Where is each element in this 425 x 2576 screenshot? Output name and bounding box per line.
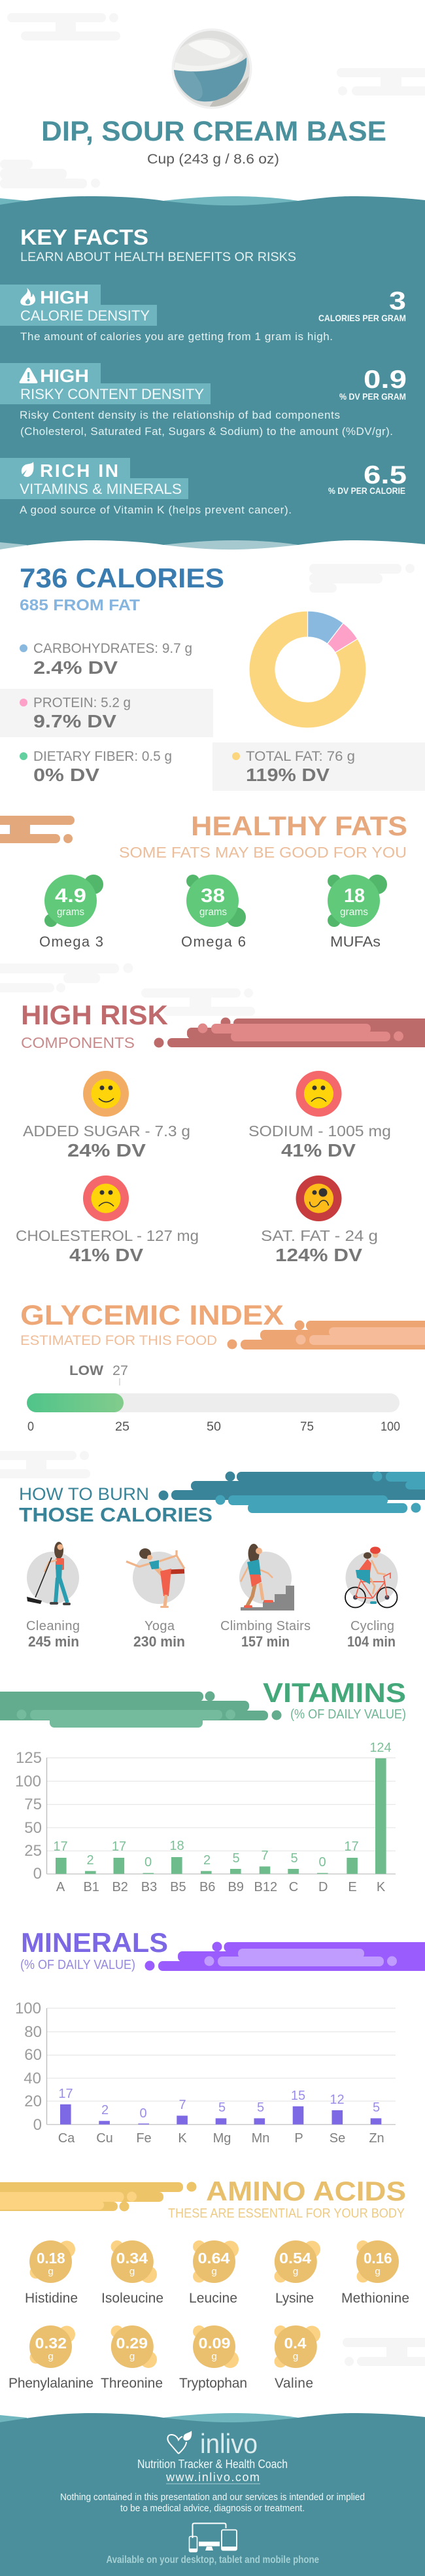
gauge: glycemic index: 100	[381, 1420, 400, 1434]
risk: cholesterol: 41% DV	[69, 1245, 143, 1265]
gauge: glycemic index: 25	[115, 1420, 129, 1434]
stat: total fat: TOTAL FAT: 76 g	[246, 749, 355, 764]
activity: cleaning: 245 min	[28, 1633, 79, 1650]
stat: carbohydrates	[20, 641, 192, 678]
amino: phenylalanine: Phenylalanine	[8, 2376, 94, 2391]
donut chart: macronutrients	[249, 611, 366, 728]
risk: added sugar	[23, 1071, 190, 1160]
heading: minerals: MINERALS	[21, 1927, 168, 1958]
decorative cloud: burn	[0, 1451, 90, 1478]
bar chart: vitamins: 25	[24, 1842, 42, 1860]
icon: leaf	[22, 462, 33, 477]
amino: tryptophan: g	[211, 2351, 217, 2362]
bar chart: vitamins: C	[289, 1880, 298, 1894]
decorative clouds: high risk	[0, 963, 255, 1016]
bar chart: vitamins: 0	[33, 1865, 42, 1883]
bar chart: vitamins: 124	[369, 1741, 392, 1755]
bar chart: vitamins: 5	[232, 1851, 240, 1866]
risk: added sugar: 24% DV	[67, 1140, 146, 1160]
bar chart: vitamins: 125	[16, 1749, 42, 1767]
gauge: glycemic index: 75	[300, 1420, 314, 1434]
gauge: glycemic index: 27	[112, 1363, 128, 1378]
disclaimer: to be a medical advice, diagnosis or treatment.	[120, 2503, 305, 2514]
fat: omega 6	[181, 875, 246, 950]
decorative cloud: amino acids	[343, 2338, 425, 2366]
heading: amino acids: AMINO ACIDS	[206, 2176, 406, 2206]
stat: protein: PROTEIN: 5.2 g	[33, 695, 131, 710]
fat: omega 6: 38	[201, 885, 225, 907]
activity: climbing stairs: 157 min	[241, 1633, 290, 1650]
amino: valine	[275, 2325, 320, 2391]
bar chart: vitamins: K	[377, 1880, 386, 1894]
bar chart: vitamins: 2	[86, 1853, 94, 1868]
subheading: vitamins: (% OF DAILY VALUE)	[290, 1707, 406, 1722]
serving size: Cup (243 g / 8.6 oz)	[147, 152, 279, 167]
gauge: glycemic index	[27, 1363, 400, 1434]
bar chart: minerals: Mg	[213, 2131, 231, 2146]
amino: histidine	[25, 2240, 78, 2306]
bar chart: vitamins: D	[318, 1880, 328, 1894]
disclaimer	[60, 2492, 365, 2514]
activity: cleaning	[26, 1542, 80, 1650]
fact: calorie density: HIGH	[40, 287, 89, 307]
bar chart: vitamins: 7	[261, 1849, 269, 1863]
fat: omega 3	[39, 875, 103, 950]
stat: protein	[0, 689, 213, 737]
panel: footer	[0, 2428, 425, 2576]
bar chart: vitamins: E	[348, 1880, 357, 1894]
bar chart: vitamins: B12	[254, 1880, 277, 1894]
logo: inlivo	[167, 2428, 258, 2459]
amino: methionine: 0.16	[364, 2250, 392, 2267]
subheading: glycemic index: ESTIMATED FOR THIS FOOD	[20, 1333, 217, 1348]
bar chart: minerals: 17	[58, 2087, 73, 2101]
heading: healthy fats: HEALTHY FATS	[191, 810, 407, 841]
decorative bars: healthy fats	[0, 816, 75, 843]
bar chart: vitamins: 17	[112, 1839, 126, 1854]
heading: glycemic index: GLYCEMIC INDEX	[20, 1300, 284, 1331]
bar chart: minerals: 40	[24, 2070, 41, 2087]
amino: histidine: 0.18	[37, 2250, 65, 2267]
amino: phenylalanine: 0.32	[35, 2335, 67, 2352]
amino: tryptophan	[179, 2325, 247, 2391]
stat: dietary fiber	[20, 749, 172, 785]
decorative bars: burn	[158, 1472, 425, 1513]
decorative bars: high risk	[154, 1018, 425, 1048]
bar chart: minerals: 20	[24, 2093, 42, 2110]
stat: total fat	[212, 742, 425, 791]
fact: calorie density: CALORIE DENSITY	[20, 307, 150, 324]
amino: phenylalanine	[8, 2325, 94, 2391]
icon: woman sweeping	[27, 1542, 71, 1605]
bar chart: vitamins: B1	[83, 1880, 99, 1894]
fact: risky content density	[0, 363, 407, 438]
icon: woman cycling	[345, 1546, 398, 1608]
fact: calorie density	[0, 285, 406, 343]
activity: yoga: Yoga	[144, 1619, 175, 1633]
activity: cycling: Cycling	[350, 1619, 394, 1633]
bar chart: vitamins: 2	[203, 1853, 211, 1868]
risk: saturated fat: 124% DV	[275, 1245, 362, 1265]
stat: dietary fiber: 0% DV	[33, 765, 99, 785]
amino: leucine	[189, 2240, 239, 2306]
bar chart: vitamins: 0	[144, 1855, 152, 1870]
activity: cycling	[345, 1546, 398, 1650]
activity: climbing stairs	[220, 1544, 311, 1650]
bar chart: vitamins: 17	[344, 1839, 359, 1854]
title: DIP, SOUR CREAM BASE	[41, 116, 386, 147]
icon: woman in yoga pose	[126, 1548, 184, 1608]
subheading: minerals: (% OF DAILY VALUE)	[20, 1958, 135, 1972]
fact: rich in vitamins and minerals: % DV PER CALORIE	[328, 485, 405, 496]
bar chart: minerals: 0	[139, 2106, 147, 2121]
amino: methionine: g	[375, 2266, 381, 2277]
subheading: healthy fats: SOME FATS MAY BE GOOD FOR YOU	[119, 844, 407, 861]
amino: lysine: 0.54	[279, 2250, 311, 2267]
bar chart: minerals: 100	[15, 2000, 41, 2017]
bar chart: vitamins: 17	[53, 1839, 68, 1854]
fact: calorie density: 3	[389, 287, 406, 315]
decorative bars: glycemic index	[228, 1320, 425, 1349]
amino: leucine: 0.64	[197, 2250, 230, 2267]
risk: saturated fat: SAT. FAT - 24 g	[261, 1227, 378, 1244]
bar chart: vitamins: 100	[15, 1773, 41, 1790]
decorative cloud: calories	[309, 564, 415, 593]
fat: omega 3: Omega 3	[39, 933, 103, 950]
icon: woman climbing stairs	[241, 1544, 294, 1610]
bar chart: minerals: 0	[33, 2116, 42, 2134]
fact: rich in vitamins and minerals: 6.5	[364, 461, 407, 489]
amino: tryptophan: 0.09	[199, 2335, 230, 2352]
amino: methionine	[341, 2240, 409, 2306]
fat: omega 3: grams	[57, 907, 84, 918]
subheading: amino acids: THESE ARE ESSENTIAL FOR YOUR BODY	[168, 2206, 405, 2221]
amino: lysine: Lysine	[275, 2291, 314, 2306]
amino: threonine: g	[129, 2351, 135, 2362]
disclaimer: Nothing contained in this presentation and our services is intended or implied	[60, 2492, 365, 2503]
heading: high risk: HIGH RISK	[21, 1000, 168, 1030]
activity: yoga: 230 min	[133, 1633, 185, 1650]
amino: methionine: Methionine	[341, 2291, 409, 2306]
amino: threonine: Threonine	[101, 2376, 163, 2391]
fat: omega 6: Omega 6	[181, 933, 246, 950]
bar chart: vitamins	[15, 1741, 396, 1894]
amino: threonine: 0.29	[116, 2335, 148, 2352]
fact: risky content density: Risky Content density is the relationship of bad components	[20, 409, 340, 421]
risk: sodium: SODIUM - 1005 mg	[248, 1123, 391, 1140]
stat: dietary fiber: DIETARY FIBER: 0.5 g	[33, 749, 172, 764]
gauge: glycemic index: LOW	[69, 1363, 103, 1378]
food photo: sour cream bowl	[171, 28, 252, 109]
bar chart: vitamins: A	[56, 1880, 65, 1894]
amino: isoleucine: g	[129, 2266, 135, 2277]
panel: key facts	[0, 215, 425, 549]
heading: vitamins: VITAMINS	[263, 1677, 406, 1708]
fact: calorie density: CALORIES PER GRAM	[318, 313, 406, 323]
bar chart: minerals: 7	[178, 2098, 186, 2112]
fact: risky content density: (Cholesterol, Saturated Fat, Sugars & Sodium) to the amount (%DV/gr).	[20, 425, 393, 438]
amino: leucine: g	[211, 2266, 217, 2277]
amino: lysine	[275, 2240, 320, 2306]
amino: isoleucine: 0.34	[116, 2250, 148, 2267]
bar chart: minerals: P	[294, 2131, 303, 2146]
fat: MUFAs: 18	[344, 885, 365, 907]
fat: omega 3: 4.9	[55, 885, 86, 907]
subheading: components: COMPONENTS	[21, 1034, 135, 1051]
bar chart: vitamins: B6	[199, 1880, 215, 1894]
amino: histidine: Histidine	[25, 2291, 78, 2306]
risk: added sugar: ADDED SUGAR - 7.3 g	[23, 1123, 190, 1140]
heading: calories: 736 CALORIES	[20, 563, 224, 593]
bar chart: minerals: 5	[257, 2100, 264, 2115]
subheading: from fat: 685 FROM FAT	[20, 597, 140, 614]
gauge: glycemic index: 0	[27, 1420, 34, 1434]
gauge: glycemic index: 50	[207, 1420, 221, 1434]
activity: yoga	[126, 1548, 185, 1650]
bar chart: vitamins: 75	[24, 1796, 42, 1813]
bar chart: minerals: Zn	[369, 2131, 384, 2146]
bar chart: minerals: Ca	[58, 2131, 75, 2146]
stat: protein: 9.7% DV	[33, 711, 116, 731]
fat: MUFAs: grams	[340, 907, 368, 918]
bar chart: minerals: 12	[330, 2093, 345, 2107]
bar chart: vitamins: 50	[24, 1819, 42, 1837]
decorative clouds: header	[0, 13, 425, 188]
fact: risky content density: RISKY CONTENT DENSITY	[20, 386, 204, 402]
heading: those calories: THOSE CALORIES	[19, 1503, 212, 1526]
stat: carbohydrates: 2.4% DV	[33, 657, 118, 678]
amino: valine: g	[293, 2351, 298, 2362]
fat: omega 6: grams	[199, 907, 227, 918]
risk: sodium	[248, 1071, 391, 1160]
website link: www.inlivo.com	[165, 2471, 260, 2484]
bar chart: minerals: 5	[373, 2100, 380, 2115]
fact: rich in vitamins and minerals: VITAMINS & MINERALS	[20, 481, 182, 497]
bar chart: minerals: 15	[291, 2089, 305, 2103]
fat: MUFAs: MUFAs	[330, 933, 381, 950]
fact: risky content density: 0.9	[364, 366, 407, 394]
wave: top of footer	[0, 2413, 425, 2433]
wave: bottom of key facts	[0, 540, 425, 556]
bar chart: vitamins: 18	[169, 1839, 184, 1853]
bar chart: minerals: 2	[101, 2103, 109, 2117]
bar chart: vitamins: B5	[170, 1880, 186, 1894]
decorative bars: amino acids	[0, 2182, 196, 2211]
amino: leucine: Leucine	[189, 2291, 237, 2306]
risk: sodium: 41% DV	[281, 1140, 356, 1160]
icon: devices	[190, 2524, 237, 2552]
bar chart: minerals: Fe	[136, 2131, 152, 2146]
heading: how to burn: HOW TO BURN	[19, 1484, 149, 1504]
amino: tryptophan: Tryptophan	[179, 2376, 247, 2391]
heading: key facts: KEY FACTS	[20, 225, 148, 249]
risk: cholesterol	[16, 1175, 199, 1265]
subheading: key facts: LEARN ABOUT HEALTH BENEFITS OR RISKS	[20, 251, 296, 264]
amino: isoleucine: Isoleucine	[101, 2291, 163, 2306]
bar chart: minerals: Mn	[252, 2131, 269, 2146]
bar chart: minerals: 5	[218, 2100, 226, 2115]
amino: lysine: g	[293, 2266, 298, 2277]
bar chart: minerals: 60	[24, 2046, 42, 2064]
fact: rich in vitamins and minerals: RICH IN	[40, 461, 118, 481]
tagline: Nutrition Tracker & Health Coach	[137, 2458, 288, 2471]
availability note: Available on your desktop, tablet and mobile phone	[106, 2554, 319, 2566]
bar chart: minerals	[15, 2000, 396, 2146]
amino: valine: Valine	[275, 2376, 313, 2391]
bar chart: minerals: Cu	[96, 2131, 113, 2146]
risk: cholesterol: CHOLESTEROL - 127 mg	[16, 1227, 199, 1244]
bar chart: minerals: K	[178, 2131, 187, 2146]
amino: threonine	[101, 2325, 163, 2391]
icon: warning triangle	[20, 368, 37, 383]
bar chart: vitamins: 0	[318, 1855, 326, 1870]
amino: valine: 0.4	[284, 2335, 307, 2352]
fact: rich in vitamins and minerals: A good source of Vitamin K (helps prevent cancer).	[20, 504, 292, 516]
bar chart: vitamins: B2	[112, 1880, 128, 1894]
fact: risky content density: HIGH	[40, 366, 89, 386]
wave: top of key facts	[0, 196, 425, 216]
fact: rich in vitamins and minerals	[0, 458, 407, 516]
bar chart: minerals: Se	[330, 2131, 345, 2146]
risk: saturated fat	[261, 1175, 378, 1265]
logo: inlivo: inlivo	[200, 2428, 258, 2459]
decorative bars: vitamins	[0, 1692, 281, 1728]
activity: cleaning: Cleaning	[26, 1619, 80, 1633]
fat: MUFAs	[328, 875, 387, 950]
bar chart: vitamins: B3	[141, 1880, 157, 1894]
bar chart: vitamins: 5	[290, 1851, 298, 1866]
icon: flame	[20, 288, 35, 305]
activity: cycling: 104 min	[347, 1633, 396, 1650]
stat: total fat: 119% DV	[246, 765, 330, 785]
stat: carbohydrates: CARBOHYDRATES: 9.7 g	[33, 641, 192, 656]
amino: histidine: g	[48, 2266, 54, 2277]
amino: phenylalanine: g	[48, 2351, 54, 2362]
bar chart: minerals: 80	[24, 2023, 42, 2041]
activity: climbing stairs: Climbing Stairs	[220, 1619, 311, 1633]
fact: calorie density: The amount of calories you are getting from 1 gram is high.	[20, 330, 333, 343]
amino: isoleucine	[101, 2240, 163, 2306]
bar chart: vitamins: B9	[228, 1880, 244, 1894]
fact: risky content density: % DV PER GRAM	[339, 391, 406, 402]
decorative bars: minerals	[145, 1941, 425, 1971]
